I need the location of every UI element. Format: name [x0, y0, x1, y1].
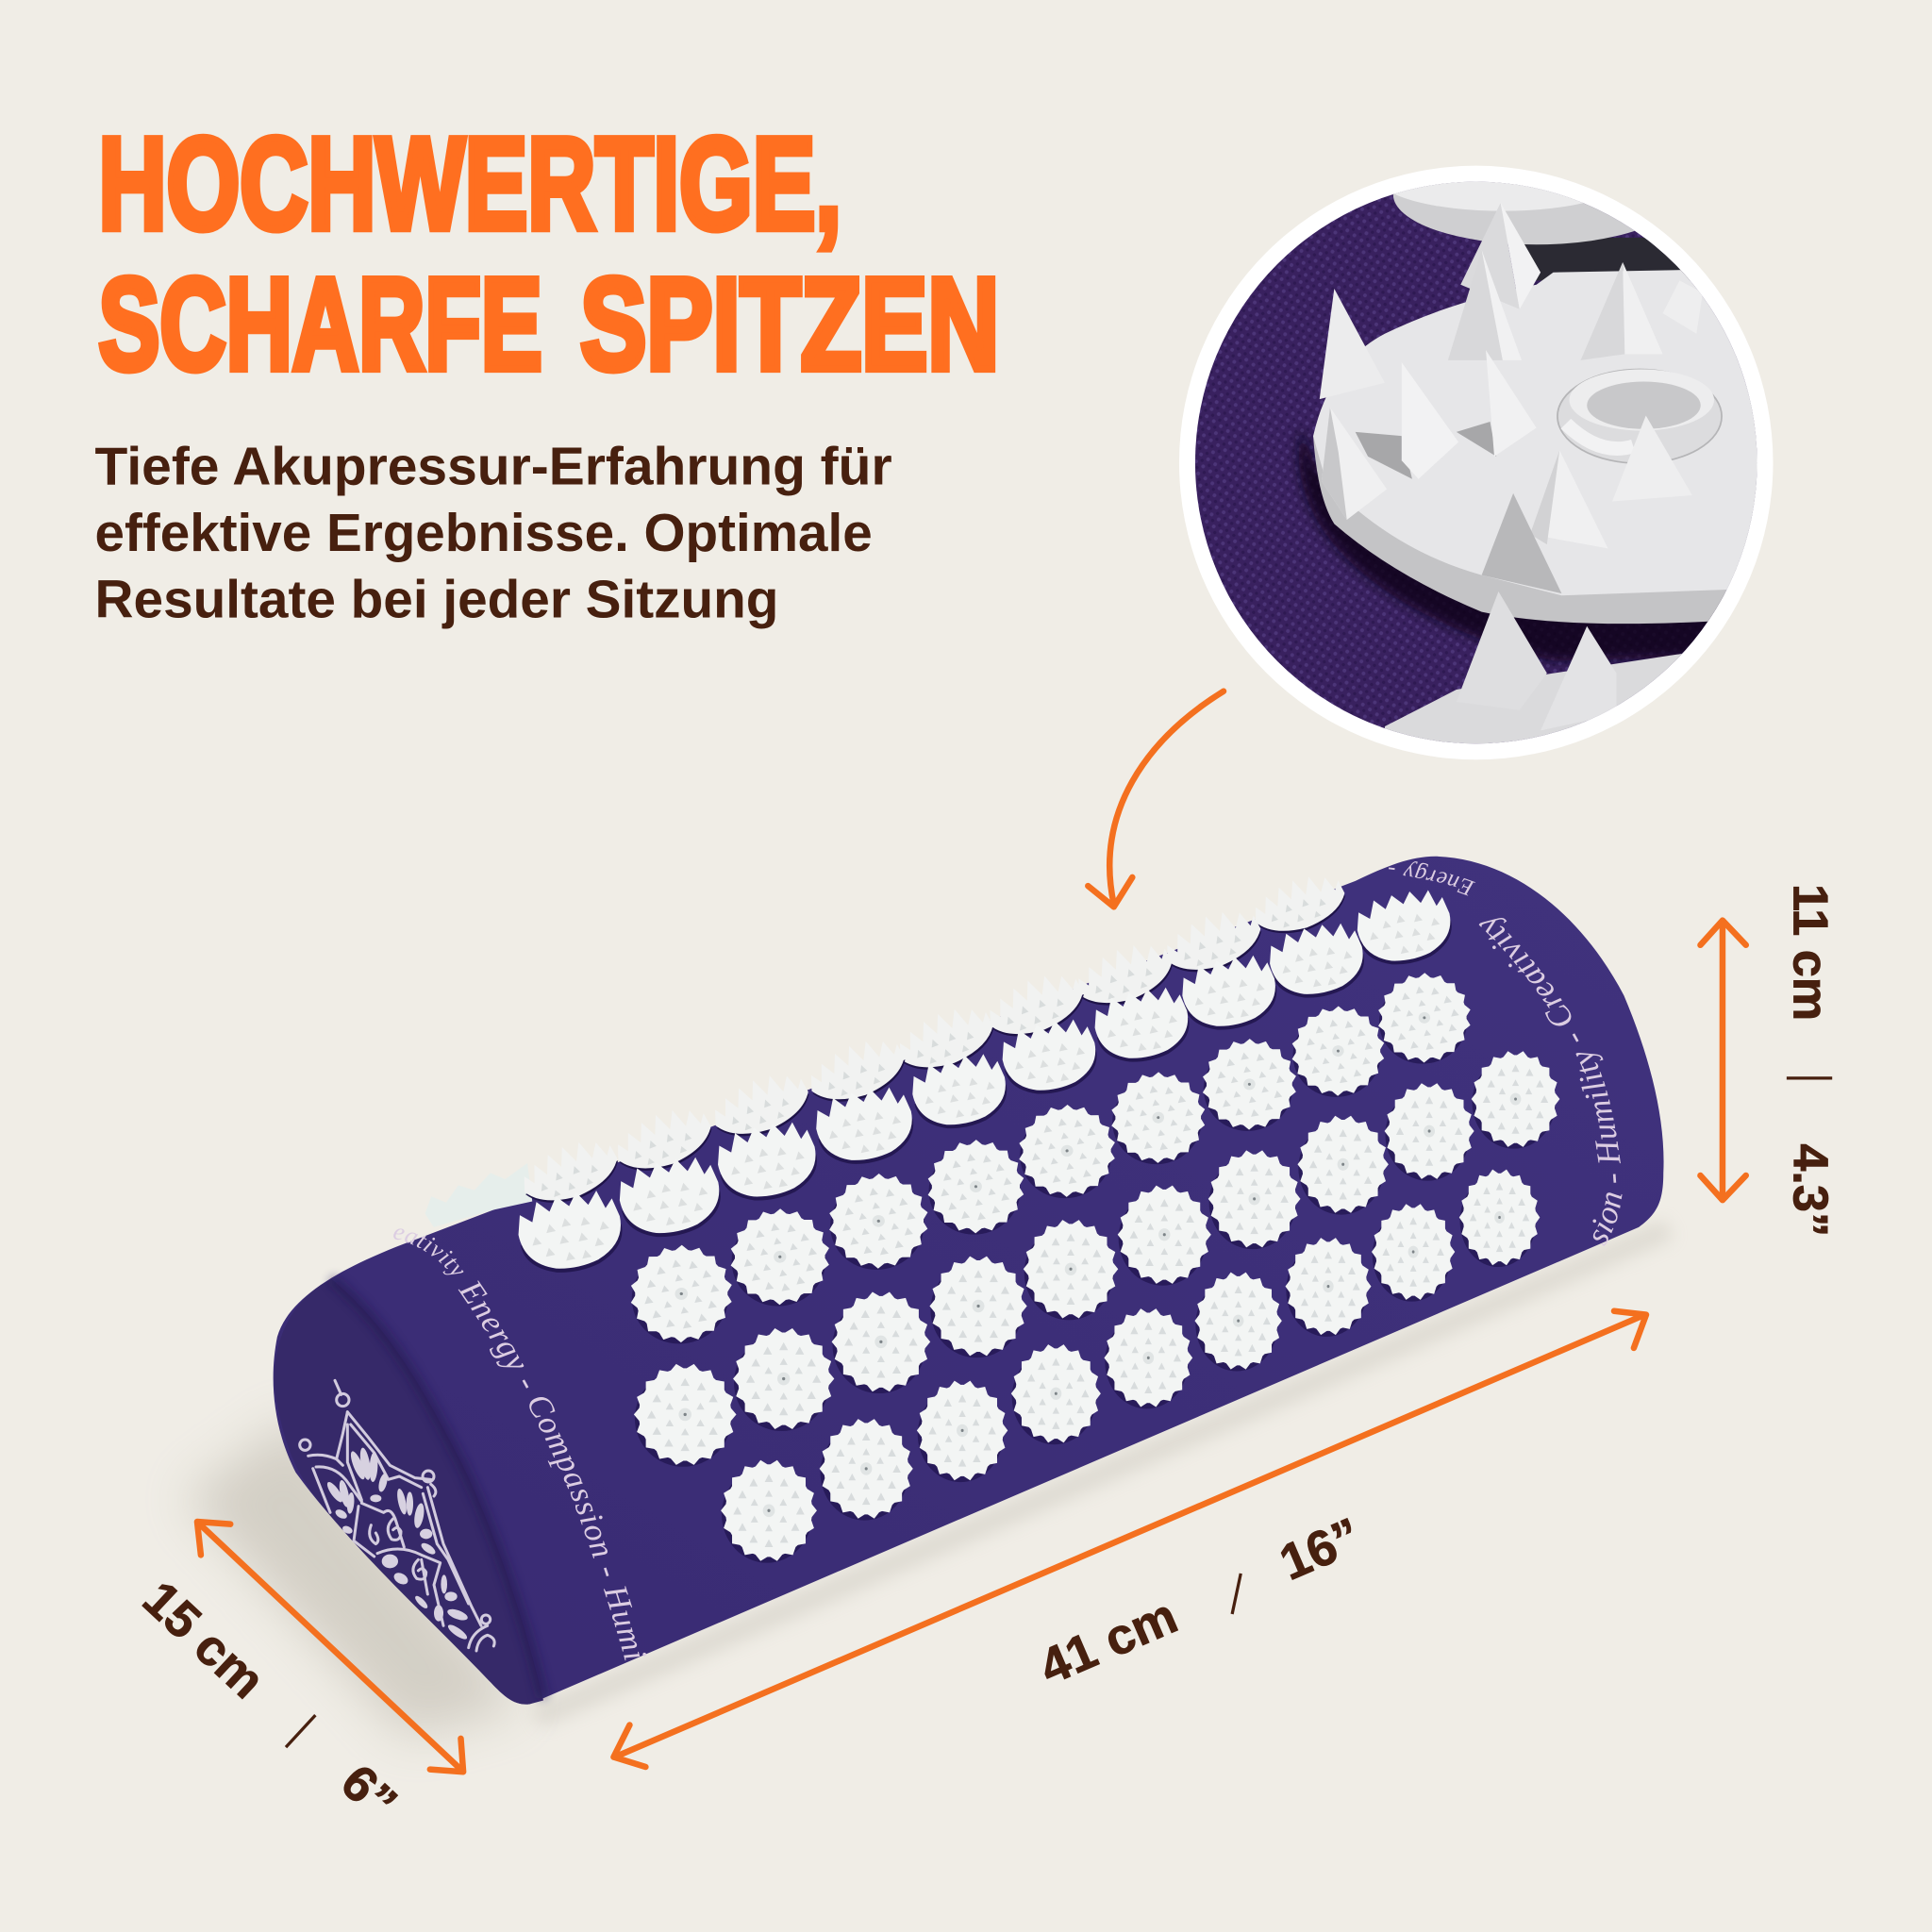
top edge row of discs: [514, 866, 1352, 1215]
fan petals: [348, 1450, 368, 1481]
pillow body: [274, 857, 1664, 1705]
circular close-up photo of spikes: [1179, 142, 1790, 764]
fourth row of discs: [634, 1051, 1559, 1467]
title: HOCHWERTIGE,: [98, 111, 841, 257]
height dimension arrow: [1700, 921, 1746, 1200]
center ring: [1557, 369, 1722, 463]
dark shadow under disc: [1298, 427, 1764, 661]
body text: Resultate bei jeder Sitzung: [95, 569, 778, 628]
back disc: [1392, 181, 1635, 245]
length dimension arrow: [613, 1311, 1646, 1767]
printed words on right side: [1389, 861, 1623, 1246]
depth label: 6”: [330, 1755, 408, 1832]
title: [98, 111, 999, 397]
end cap seam: [331, 1279, 543, 1698]
title: SCHARFE: [98, 252, 542, 397]
height label: 11 cm: [1783, 884, 1838, 1021]
height label: 4.3”: [1783, 1143, 1838, 1237]
printed words on right side: Energy -: [1389, 861, 1475, 896]
depth label: 15 cm: [132, 1571, 275, 1709]
length label: [1032, 1508, 1369, 1696]
main disc rim: [1313, 387, 1790, 624]
third row of discs: [623, 966, 1478, 1352]
printed words on right side: sion - Humility - Creativity: [1479, 918, 1623, 1246]
pillow shadow: [185, 1220, 1674, 1738]
length label: 41 cm: [1032, 1589, 1186, 1696]
acupressure pillow: [274, 857, 1664, 1705]
main disc top surface: [1313, 268, 1790, 595]
title: SPITZEN: [580, 252, 999, 397]
shaded sockets: [1356, 432, 1412, 479]
depth label: [132, 1571, 408, 1832]
torn edge of mat behind discs: [425, 1163, 532, 1227]
fifth row of discs: [721, 1170, 1540, 1563]
body text: Tiefe Akupressur-Erfahrung für: [95, 436, 892, 495]
printed words on left side: eativity: [393, 1228, 464, 1275]
body text: [95, 436, 892, 628]
foreground disc: [1385, 653, 1688, 747]
curved arrow from close-up to pillow: [1088, 691, 1224, 907]
second row of discs: [512, 884, 1457, 1281]
body text: effektive Ergebnisse. Optimale: [95, 503, 873, 562]
depth dimension arrow: [197, 1522, 463, 1772]
length label: 16”: [1272, 1508, 1369, 1591]
printed words on left side: Energy - Compassion - Humility: [458, 1280, 646, 1660]
pillow end cap: [275, 1279, 543, 1705]
height label: [1783, 884, 1838, 1237]
spikes: [1460, 203, 1520, 309]
mandala ornament on end cap: [300, 1380, 494, 1651]
printed words on left side: [393, 1228, 646, 1660]
